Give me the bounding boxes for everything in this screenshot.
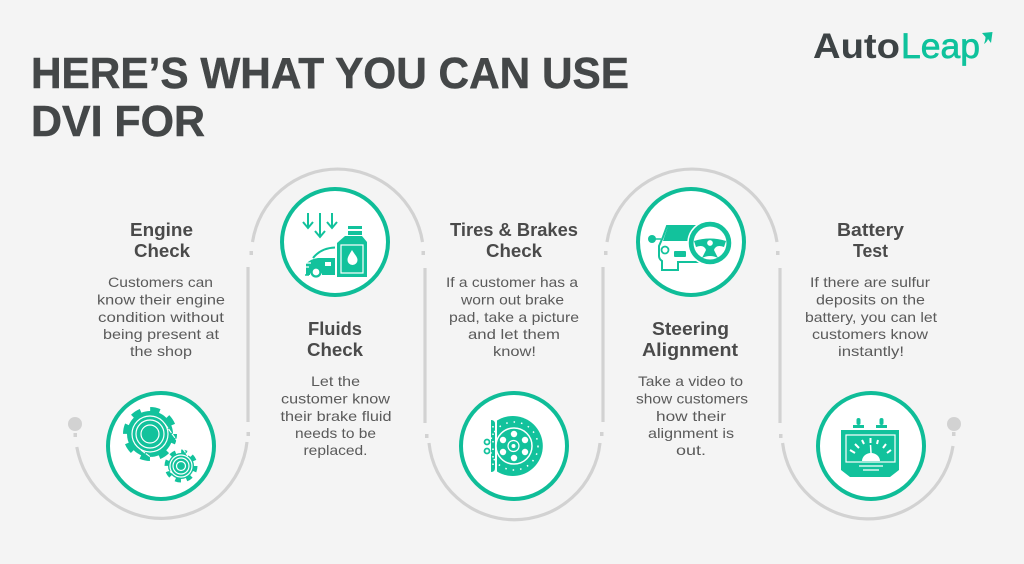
heading: tires and brakes check: Tires & Brakes [450, 220, 578, 240]
text: tires and brakes description: pad, take a picture [449, 309, 579, 325]
text: steering alignment description: show customers [636, 390, 748, 406]
panel: fluids check [280, 189, 392, 458]
text: tires and brakes description [446, 274, 579, 359]
heading: tires and brakes check: Check [486, 241, 543, 261]
text: engine check description: Customers can [108, 274, 213, 290]
text: steering alignment description: out. [676, 442, 706, 458]
heading: fluids check: Check [307, 340, 364, 360]
heading: steering alignment: Steering [652, 319, 729, 339]
text: engine check description: the shop [130, 343, 192, 359]
text: fluids check description: customer know [281, 390, 391, 406]
text: battery test description: battery, you can let [805, 309, 937, 325]
text: steering alignment description: how their [656, 408, 726, 424]
text: battery test description [805, 274, 937, 359]
text: engine check description: condition without [98, 309, 224, 325]
heading: steering alignment: Alignment [642, 340, 738, 360]
text: steering alignment description: alignment is [648, 425, 734, 441]
title [31, 49, 629, 146]
logo: AutoLeap: Leap [901, 27, 980, 66]
heading: battery test: Battery [837, 220, 904, 240]
icon: battery meter [818, 393, 924, 499]
panel: battery test [805, 220, 937, 499]
heading: battery test [837, 220, 904, 261]
text: engine check description: know their engine [97, 292, 225, 308]
icon: fluid bottle and car [282, 189, 388, 295]
text: tires and brakes description: worn out brake [460, 292, 564, 308]
text: engine check description: being present at [103, 326, 219, 342]
text: steering alignment description [636, 373, 748, 458]
heading: engine check [130, 220, 193, 261]
text: tires and brakes description: and let them [468, 326, 560, 342]
winding path connector [68, 169, 961, 520]
heading: engine check: Check [134, 241, 191, 261]
heading: engine check: Engine [130, 220, 193, 240]
text: battery test description: If there are sulfur [810, 274, 930, 290]
icon: brake disc [461, 393, 567, 499]
text: tires and brakes description: If a customer has a [446, 274, 578, 290]
heading: fluids check: Fluids [308, 319, 362, 339]
heading: battery test: Test [853, 241, 888, 261]
text: fluids check description: replaced. [304, 442, 368, 458]
text: battery test description: instantly! [838, 343, 904, 359]
text: steering alignment description: Take a video to [638, 373, 743, 389]
logo: AutoLeap: Auto [813, 27, 900, 66]
text: battery test description: deposits on the [816, 292, 925, 308]
text: fluids check description: needs to be [295, 425, 376, 441]
text: tires and brakes description: know! [493, 343, 536, 359]
icon: car and steering wheel [638, 189, 744, 295]
panel: tires and brakes check [446, 220, 579, 499]
text: fluids check description: Let the [311, 373, 360, 389]
icon: gears [108, 393, 214, 499]
panel: steering alignment [636, 189, 748, 458]
title: DVI FOR [31, 97, 205, 146]
text: engine check description [97, 274, 225, 359]
heading: steering alignment [642, 319, 738, 360]
text: battery test description: customers know [812, 326, 929, 342]
heading: tires and brakes check [450, 220, 578, 261]
heading: fluids check [307, 319, 364, 360]
panel: engine check [97, 220, 225, 499]
logo: AutoLeap [813, 27, 992, 66]
text: fluids check description: their brake fluid [280, 408, 392, 424]
title: HERE’S WHAT YOU CAN USE [31, 49, 629, 98]
text: fluids check description [280, 373, 392, 458]
